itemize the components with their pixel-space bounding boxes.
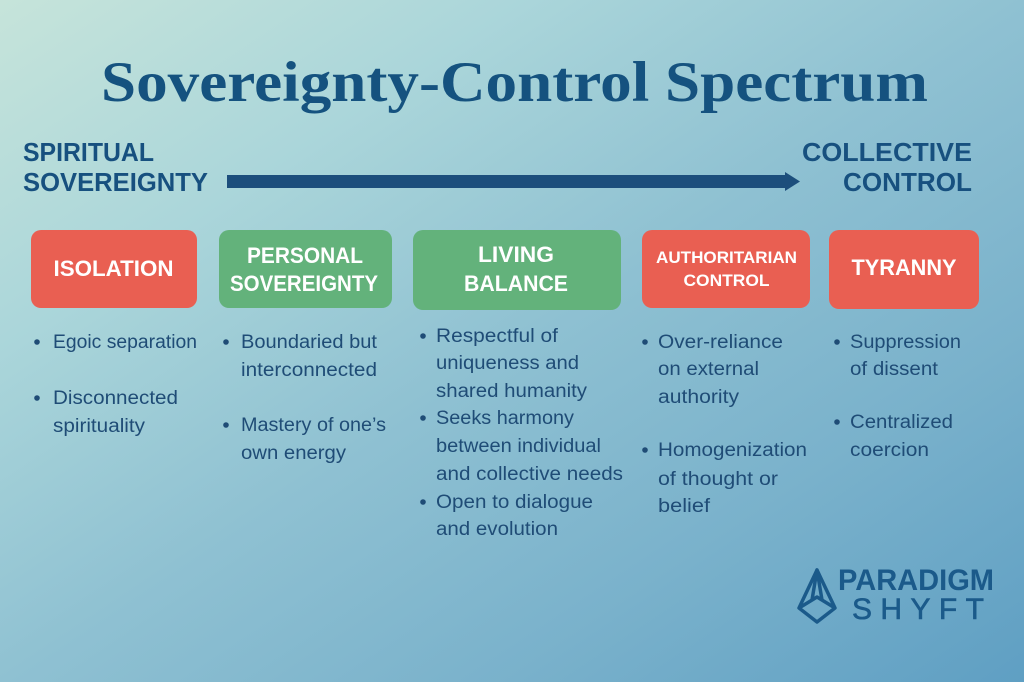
tyranny header box: TYRANNY <box>852 255 957 280</box>
authoritarian control header box <box>642 230 810 308</box>
right spectrum label: CONTROL <box>843 169 972 197</box>
personal sovereignty bullet list: own energy <box>241 443 347 464</box>
logo wordmark: SHYFT <box>852 593 984 626</box>
living balance bullet list: Open to dialogue <box>436 492 593 513</box>
panel: authoritarian control <box>642 230 810 517</box>
living balance bullet list: Seeks harmony <box>436 408 575 429</box>
isolation bullet list: Egoic separation <box>53 332 197 353</box>
left spectrum label: SOVEREIGNTY <box>23 169 208 197</box>
living balance header box: LIVING <box>478 242 554 267</box>
personal sovereignty bullet list: Boundaried but <box>241 332 378 353</box>
personal sovereignty bullet list <box>223 332 386 464</box>
personal sovereignty header box: PERSONAL <box>247 243 363 268</box>
right spectrum label: COLLECTIVE <box>802 139 972 167</box>
isolation header box <box>31 230 197 308</box>
living balance bullet list: between individual <box>436 436 601 457</box>
panel: personal sovereignty <box>219 230 392 464</box>
living balance bullet list: Respectful of <box>436 326 559 347</box>
panel: tyranny <box>829 230 979 461</box>
spectrum arrow <box>227 172 800 191</box>
panel: isolation <box>31 230 197 437</box>
right spectrum label <box>802 139 972 197</box>
tyranny bullet list: coercion <box>850 440 929 461</box>
authoritarian control bullet list: authority <box>658 387 740 408</box>
tyranny bullet list: Suppression <box>850 332 961 353</box>
personal sovereignty bullet list: interconnected <box>241 360 377 381</box>
logo: paradigm shyft <box>799 564 994 626</box>
isolation bullet list <box>34 332 197 437</box>
living balance bullet list: and collective needs <box>436 464 623 485</box>
logo wordmark: PARADIGM <box>838 564 994 597</box>
personal sovereignty header box: SOVEREIGNTY <box>230 271 378 296</box>
isolation bullet list: Disconnected <box>53 388 178 409</box>
isolation header box: ISOLATION <box>54 256 174 281</box>
authoritarian control bullet list: belief <box>658 496 711 517</box>
left spectrum label <box>23 139 208 197</box>
icon: faceted arrowhead <box>799 570 835 622</box>
logo wordmark <box>838 564 994 626</box>
living balance bullet list <box>420 326 623 540</box>
authoritarian control header box: AUTHORITARIAN <box>656 248 797 267</box>
living balance bullet list: shared humanity <box>436 381 588 402</box>
living balance bullet list: uniqueness and <box>436 353 579 374</box>
tyranny bullet list <box>834 332 961 461</box>
living balance bullet list: and evolution <box>436 519 558 540</box>
authoritarian control bullet list: Over-reliance <box>658 332 783 353</box>
tyranny bullet list: Centralized <box>850 412 953 433</box>
authoritarian control bullet list: on external <box>658 359 759 380</box>
left spectrum label: SPIRITUAL <box>23 139 154 167</box>
authoritarian control bullet list <box>642 332 807 517</box>
authoritarian control bullet list: Homogenization <box>658 440 807 461</box>
personal sovereignty header box <box>219 230 392 308</box>
personal sovereignty bullet list: Mastery of one’s <box>241 415 386 436</box>
authoritarian control bullet list: of thought or <box>658 469 779 490</box>
tyranny bullet list: of dissent <box>850 359 939 380</box>
living balance header box: BALANCE <box>464 271 568 296</box>
authoritarian control header box: CONTROL <box>684 271 770 290</box>
title: Sovereignty-Control Spectrum <box>101 51 928 114</box>
isolation bullet list: spirituality <box>53 416 146 437</box>
panel: living balance <box>413 230 623 540</box>
tyranny header box <box>829 230 979 309</box>
living balance header box <box>413 230 621 310</box>
